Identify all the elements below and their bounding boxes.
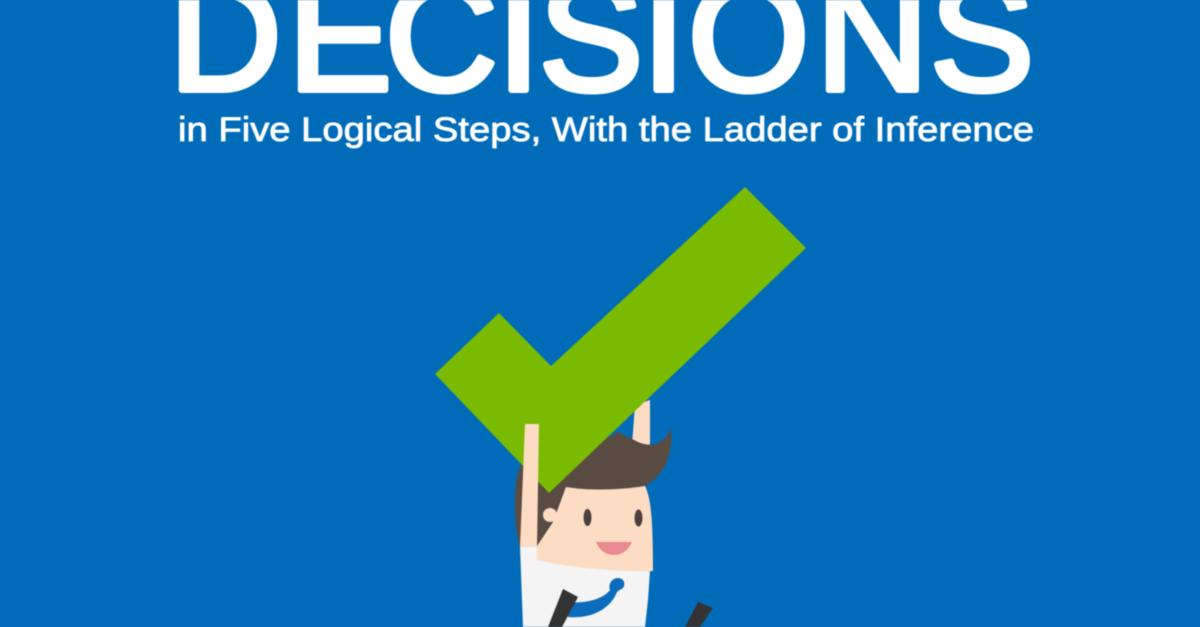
left suspender strap: [548, 589, 578, 627]
face: [537, 486, 653, 571]
necktie: [568, 578, 624, 617]
right suspender strap: [685, 602, 713, 627]
right arm: [632, 400, 650, 447]
hair: [515, 428, 671, 548]
check mark: [435, 187, 806, 493]
ear: [543, 508, 557, 522]
subtitle: in Five Logical Steps, With the Ladder of Inference: [178, 111, 1034, 149]
illustration: businessman holding a check mark: [435, 187, 806, 627]
eyes: [584, 509, 642, 526]
mouth: [596, 542, 632, 555]
left arm: [520, 424, 539, 547]
shirt: [520, 546, 650, 627]
